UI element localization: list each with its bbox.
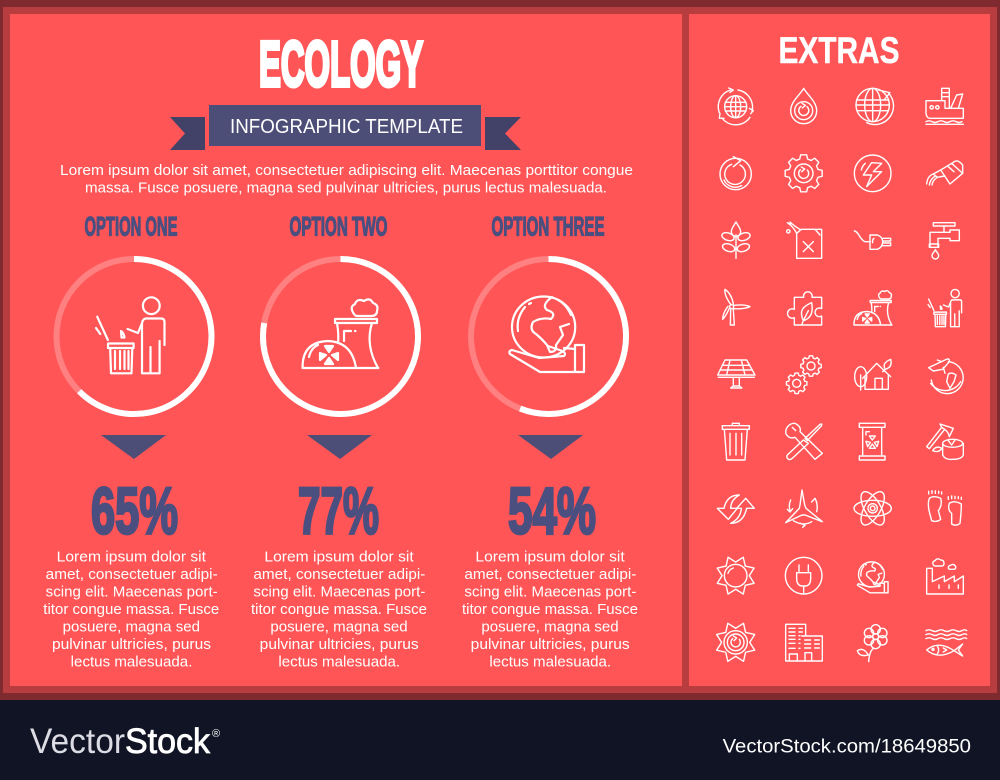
body text: option three: amet, consectetuer adipi- (464, 567, 637, 583)
icon: sun (717, 557, 754, 594)
icon rows 7 to 9 (717, 488, 967, 662)
icon: solar panel (718, 360, 755, 388)
pointer triangle (101, 435, 166, 459)
title: ECOLOGY (259, 28, 423, 100)
icon: gear (785, 155, 822, 192)
image id: VectorStock.com/18649850 (723, 736, 971, 758)
pointer triangle (518, 435, 583, 459)
icon rows 4 to 6 (718, 289, 963, 460)
icon: watering can (927, 161, 963, 185)
heading: option two: OPTION TWO (290, 212, 388, 242)
heading: option three: OPTION THREE (492, 212, 604, 242)
ribbon banner: INFOGRAPHIC TEMPLATE (230, 116, 463, 138)
value: 77%: 77% (298, 474, 379, 548)
body text: option one: pulvinar ultricies, purus (52, 637, 211, 653)
intro text (60, 162, 633, 196)
pointer triangle (307, 435, 372, 459)
ribbon banner (170, 105, 521, 150)
body text: option three: titor congue massa. Fusce (462, 602, 638, 618)
body text: option one: lectus malesuada. (71, 654, 192, 670)
icon: plug in circle (785, 557, 822, 594)
icon: wrench and screwdriver (786, 423, 822, 459)
option one column (43, 212, 219, 670)
body text: option two: posuere, magna sed (270, 620, 408, 636)
body text: option one (43, 550, 219, 670)
icon: office buildings (786, 624, 822, 661)
icon: hand holding globe (509, 296, 584, 372)
icon: water drop (791, 88, 817, 124)
icon: sun with cycle (717, 623, 755, 661)
icon: oil platform (926, 88, 963, 124)
logo: VectorStock: Stock (125, 722, 210, 761)
icon: hand holding globe, extras (857, 562, 888, 593)
body text: option three: lectus malesuada. (489, 654, 611, 670)
body text: option two: Lorem ipsum dolor sit (264, 550, 414, 566)
icon: footprints (928, 491, 961, 525)
body text: option three: pulvinar ultricies, purus (471, 637, 630, 653)
icon: power plug (854, 231, 891, 249)
logo: VectorStock (30, 722, 220, 761)
logo: VectorStock: ® (212, 728, 220, 740)
icon: two gears (786, 356, 821, 394)
panel: ecology main (10, 14, 682, 686)
logo: VectorStock: Vector (30, 722, 125, 761)
body text: option one: titor congue massa. Fusce (43, 602, 219, 618)
icon rows 1 to 3 (718, 88, 963, 259)
option three column (462, 212, 638, 670)
donut chart: 54% (471, 259, 626, 414)
icon: small person and bin (928, 289, 962, 327)
body text: option one: Lorem ipsum dolor sit (57, 550, 206, 566)
icon: jerry can (787, 222, 822, 258)
body text: option one: scing elit. Maecenas port- (46, 584, 218, 600)
icon: two recycling arrows (717, 495, 754, 523)
body text: option two: lectus malesuada. (278, 654, 400, 670)
icon: wind turbine (723, 289, 750, 325)
panel: extras (689, 14, 990, 686)
body text: option three: Lorem ipsum dolor sit (475, 550, 625, 566)
heading: option one: OPTION ONE (84, 212, 178, 242)
icon: puzzle leaf (788, 292, 822, 325)
icon: person with trash bin (96, 297, 164, 373)
body text: option two: pulvinar ultricies, purus (260, 637, 419, 653)
footer band (0, 700, 1000, 780)
body text: option three (462, 550, 638, 670)
heading: extras: EXTRAS (778, 30, 900, 71)
icon: nuclear plant (303, 299, 378, 368)
value: 54%: 54% (508, 474, 596, 548)
intro text: Lorem ipsum dolor sit amet, consectetuer adipiscing elit. Maecenas porttitor congue (60, 162, 633, 179)
icon: trash can (722, 423, 749, 460)
donut chart: 65% (56, 259, 212, 414)
option two column (251, 212, 427, 670)
icon: globe with recycle arrows (718, 88, 753, 125)
icon: turbine with arrows (786, 490, 822, 527)
value: 65%: 65% (91, 474, 178, 548)
icon: flower (857, 625, 887, 662)
donut chart: 77% (263, 259, 418, 414)
body text: option two: amet, consectetuer adipi- (253, 567, 426, 583)
body text: option three: scing elit. Maecenas port- (464, 584, 637, 600)
icon: fish and waves (926, 630, 967, 656)
icon: globe with arrow (856, 88, 894, 125)
body text: option one: amet, consectetuer adipi- (46, 567, 218, 583)
icon: nuclear barrel (859, 423, 885, 460)
icon: factory (927, 559, 963, 594)
icon: water tap (929, 223, 959, 259)
icon: small nuclear plant (854, 291, 892, 325)
body text: option two: scing elit. Maecenas port- (253, 584, 426, 600)
body text: option three: posuere, magna sed (481, 620, 619, 636)
icon: plane over globe (929, 359, 963, 394)
body text: option two (251, 550, 427, 670)
icon: plant sprig (721, 222, 751, 258)
icon: axe and stump (927, 424, 963, 459)
icon: house and tree (855, 359, 891, 390)
icon: lightning circle (854, 155, 891, 192)
body text: option one: posuere, magna sed (63, 620, 200, 636)
intro text: massa. Fusce posuere, magna sed pulvinar ultricies, purus lectus malesuada. (85, 180, 607, 196)
body text: option two: titor congue massa. Fusce (251, 602, 427, 618)
icon: recycle circle (720, 157, 751, 190)
icon: atom (854, 488, 891, 528)
